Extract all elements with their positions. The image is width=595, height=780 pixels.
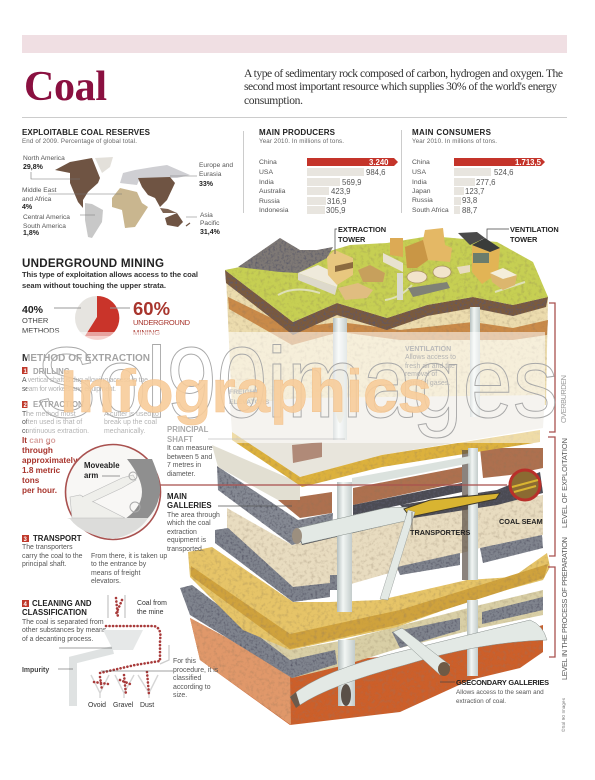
- heading: reserves: End of 2009. Percentage of global total.: [22, 138, 137, 145]
- map labels: [22, 155, 233, 237]
- label: extraction tower: TOWER: [338, 235, 366, 244]
- bar chart: consumers: Russia: [412, 197, 433, 204]
- detail circle: moveable arm: Moveable: [84, 461, 120, 470]
- note: classification: For this: [173, 658, 197, 665]
- intro text: A type of sedimentary rock composed of carbon, hydrogen and oxygen. The: [244, 67, 563, 80]
- bar chart: producers: 3.240: [369, 158, 389, 167]
- watermark: Infographics: Infographics: [60, 358, 432, 425]
- label: ventilation: Allows access to: [405, 354, 456, 361]
- galleries and lower shafts: [290, 448, 547, 708]
- label: secondary galleries: GSECONDARY GALLERIES: [456, 678, 549, 687]
- heading: producers: MAIN PRODUCERS: [259, 128, 336, 137]
- step 1 drilling: seam for workers and equipment.: [22, 386, 116, 393]
- map labels: 29,8%: [23, 164, 44, 171]
- pie chart: [75, 296, 119, 340]
- step 4 cleaning: CLEANING AND: [32, 599, 92, 608]
- label: secondary galleries: extraction of coal.: [456, 698, 506, 705]
- bar chart: producers: 984,6: [366, 168, 386, 177]
- step 3 transport: elevators.: [91, 578, 121, 585]
- illustration: mine cross-section: [180, 228, 550, 725]
- diagram labels: Dust: [140, 702, 154, 709]
- map leader lines: [31, 172, 197, 217]
- map labels: 4%: [22, 204, 33, 211]
- stratum: orange stripe: [228, 297, 548, 345]
- bracket: level of exploitation: [548, 437, 569, 556]
- bar chart: producers: Indonesia: [259, 207, 289, 214]
- heading: producers: [259, 128, 344, 145]
- map labels: Middle East: [22, 187, 57, 194]
- bar chart: consumers: 93,8: [462, 196, 477, 205]
- leader: principal shaft: [208, 438, 345, 440]
- stratum: beige under yellow: [195, 590, 543, 678]
- label: main galleries: equipment is: [167, 537, 207, 544]
- pie label 60: UNDERGROUND: [133, 318, 191, 327]
- map labels: Eurasia: [199, 171, 222, 178]
- bar chart: producers: USA: [259, 169, 273, 176]
- callout: red text: tons: [22, 476, 40, 485]
- callout: red text: 1.8 metric: [22, 466, 61, 475]
- map labels: Central America: [23, 214, 70, 221]
- bar chart: consumers: 88,7: [462, 206, 477, 215]
- heading: reserves: [22, 128, 151, 145]
- note: classification: [173, 658, 219, 699]
- bar chart: producers: 423,9: [331, 187, 351, 196]
- map labels: Europe and: [199, 162, 233, 169]
- bar chart: producers: 316,9: [327, 197, 347, 206]
- pie label 60: [133, 298, 191, 337]
- map labels: Pacific: [200, 220, 220, 227]
- label: transporters: [410, 512, 471, 537]
- label: ventilation: removal of: [405, 371, 437, 378]
- title: Coal: [24, 64, 107, 110]
- panel: exploitable coal reserves: [22, 128, 233, 238]
- label: main galleries: GALLERIES: [167, 501, 212, 510]
- bar chart: consumers: [412, 158, 545, 215]
- step 3 transport: means of freight: [91, 570, 140, 577]
- label: freight elevators: FREIGHT: [229, 389, 260, 396]
- header band: [22, 35, 567, 53]
- heading: consumers: MAIN CONSUMERS: [412, 128, 492, 137]
- callout: red text: approximately: [22, 456, 78, 465]
- step 4 cleaning: CLASSIFICATION: [22, 608, 87, 617]
- label: principal shaft: PRINCIPAL: [167, 425, 209, 434]
- stratum: brick layers: [278, 448, 543, 518]
- bar chart: producers: Russia: [259, 198, 280, 205]
- coal seam detail ring: [510, 470, 540, 500]
- upper shaft pipes: [333, 307, 480, 440]
- label: main galleries: [166, 492, 220, 553]
- stratum: surface edge: [225, 270, 548, 335]
- heading: reserves: EXPLOITABLE COAL RESERVES: [22, 128, 151, 137]
- surface paths: [278, 282, 525, 300]
- pie label 60: 60%: [133, 298, 170, 319]
- label: ventilation tower: [487, 225, 559, 244]
- label: ventilation tower: TOWER: [510, 235, 538, 244]
- step 3 transport: to the entrance by: [91, 561, 147, 568]
- extraction tower buildings: [298, 250, 385, 300]
- detail circle: moveable arm: arm: [84, 471, 98, 480]
- step 2 extraction: 2: [24, 403, 28, 409]
- bracket: overburden: OVERBURDEN: [559, 375, 568, 423]
- diagram labels: Gravel: [113, 702, 134, 709]
- map labels: Asia: [200, 212, 213, 219]
- step 2 extraction: EXTRACTION: [33, 400, 84, 409]
- step 2 extraction: mechanically.: [104, 428, 145, 435]
- stratum: beige block: [227, 495, 543, 590]
- stratum: thick yellow layer: [188, 547, 550, 650]
- world map: [55, 157, 190, 238]
- pie label 40: [22, 304, 60, 335]
- label: ventilation: harmful gases.: [405, 380, 450, 387]
- step 1 drilling: DRILLING: [33, 367, 70, 376]
- subhead: This type of exploitation allows access to the coal: [22, 270, 198, 279]
- map labels: 33%: [199, 181, 214, 188]
- pie leader lines: [54, 307, 130, 309]
- step 4 cleaning: 4: [24, 602, 28, 608]
- bar chart: producers: 569,9: [342, 178, 362, 187]
- bracket: overburden: [549, 303, 568, 432]
- diagram labels: Ovoid: [88, 702, 106, 709]
- bar chart: consumers: USA: [412, 169, 426, 176]
- step 2 extraction: The method most: [22, 411, 76, 418]
- stratum: stone bands under yellow: [180, 585, 543, 678]
- panel: method of extraction: [22, 353, 345, 709]
- label: secondary galleries: Allows access to the seam and: [456, 689, 544, 696]
- panel: main consumers: [412, 128, 545, 215]
- note: classification: according to: [173, 684, 211, 691]
- label: main galleries: MAIN: [167, 492, 187, 501]
- leader: main galleries: [218, 505, 292, 507]
- heading: consumers: [412, 128, 497, 145]
- note: classification: procedure, it is: [173, 667, 219, 674]
- label: principal shaft: [167, 425, 213, 478]
- step 3 transport: [22, 534, 167, 585]
- mountain: [238, 238, 333, 273]
- callout line: coal seam to detail circle: [157, 484, 507, 486]
- label: ventilation: [405, 346, 456, 387]
- step 3 transport: principal shaft.: [22, 561, 67, 568]
- step 4 cleaning: The coal is separated from: [22, 619, 104, 626]
- stratum: orange base: [190, 618, 543, 725]
- intro text: [244, 67, 563, 107]
- label: coal seam: COAL SEAM: [499, 517, 543, 526]
- panel: underground mining: [22, 257, 198, 340]
- bracket: level in preparation: LEVEL IN THE PROCESS OF PREPARATION: [560, 537, 569, 680]
- label: ventilation: VENTILATION: [405, 346, 451, 353]
- step 4 cleaning: [22, 599, 107, 643]
- step 2 extraction: break up the coal: [104, 419, 157, 426]
- decanting diagram: [58, 595, 173, 706]
- callout: red text: It can go: [22, 436, 56, 445]
- label: principal shaft: SHAFT: [167, 435, 193, 444]
- heading: method: METHOD OF EXTRACTION: [22, 353, 150, 364]
- step 4 cleaning: other substances by means: [22, 627, 107, 634]
- bar chart: producers: India: [259, 179, 274, 186]
- bar chart: consumers: India: [412, 179, 427, 186]
- label: ventilation: fresh air and the: [405, 363, 455, 370]
- intro text: consumption.: [244, 94, 303, 107]
- subhead: seam without touching the upper strata.: [22, 281, 166, 290]
- bracket: level of exploitation: LEVEL OF EXPLOITATION: [560, 438, 569, 528]
- note: classification: classified: [173, 675, 202, 682]
- callout: red text: per hour.: [22, 486, 57, 495]
- label: transporters: TRANSPORTERS: [410, 528, 471, 537]
- diagram labels: [22, 600, 167, 709]
- diagram labels: Coal from: [137, 600, 167, 607]
- step 2 extraction: [22, 400, 159, 435]
- label: principal shaft: between 5 and: [167, 454, 212, 461]
- heading: underground mining: UNDERGROUND MINING: [22, 257, 164, 270]
- bar chart: producers: [259, 158, 398, 215]
- diagram labels: the mine: [137, 609, 164, 616]
- step 3 transport: The transporters: [22, 544, 73, 551]
- bar chart: consumers: South Africa: [412, 207, 449, 214]
- pie label 40: OTHER: [22, 316, 49, 325]
- label: extraction tower: [335, 225, 386, 254]
- label: principal shaft: diameter.: [167, 471, 195, 478]
- credit: ©Sol 90 Images: [560, 697, 566, 732]
- intro text: second most important resource which supplies 30% of the world's energy: [244, 80, 557, 93]
- label: principal shaft: 7 metres in: [167, 462, 201, 469]
- label: ventilation tower: VENTILATION: [510, 225, 559, 234]
- map labels: South America: [23, 223, 66, 230]
- bar chart: consumers: China: [412, 159, 430, 166]
- surface: green terrain: [225, 236, 548, 322]
- label: main galleries: which the coal: [166, 520, 211, 527]
- bar chart: consumers: 524,6: [494, 168, 514, 177]
- step 1 drilling: A vertical shaft is dug allowing access to the: [22, 377, 148, 384]
- step 1 drilling: 1: [24, 369, 28, 375]
- callout: red text: [22, 436, 78, 495]
- heading: consumers: Year 2010. In millions of tons.: [412, 138, 497, 145]
- step 2 extraction: A cutter is used to: [104, 411, 159, 418]
- stratum: stone band upper: [217, 466, 333, 545]
- step 1 drilling: [22, 367, 148, 393]
- label: main galleries: The area through: [167, 512, 220, 519]
- bar chart: producers: China: [259, 159, 277, 166]
- label: main galleries: transported.: [167, 546, 204, 553]
- watermark wash: [27, 332, 545, 443]
- label: freight elevators: [229, 389, 270, 406]
- step 3 transport: 3: [24, 537, 28, 543]
- step 2 extraction: often used is that of: [22, 419, 82, 426]
- map labels: 31,4%: [200, 229, 221, 236]
- map labels: North America: [23, 155, 65, 162]
- bar chart: consumers: Japan: [412, 188, 431, 195]
- step 4 cleaning: of a decanting process.: [22, 636, 93, 643]
- label: secondary galleries: [440, 678, 549, 705]
- stratum: dark band around seam: [300, 472, 543, 545]
- stratum: white slab: [212, 395, 545, 500]
- bar chart: consumers: 277,6: [476, 178, 496, 187]
- pie label 40: 40%: [22, 304, 44, 316]
- ventilation tower buildings: [458, 232, 517, 290]
- bar chart: consumers: 123,7: [465, 187, 485, 196]
- stratum: yellow seam: [232, 430, 540, 487]
- step 3 transport: TRANSPORT: [33, 534, 82, 543]
- step 3 transport: From there, it is taken up: [91, 553, 167, 560]
- label: extraction tower: EXTRACTION: [338, 225, 386, 234]
- pie label 40: METHODS: [22, 326, 60, 335]
- bar chart: producers: Australia: [259, 188, 286, 195]
- subhead: [22, 270, 198, 290]
- heading: producers: Year 2010. In millions of tons.: [259, 138, 344, 145]
- map labels: 1,8%: [23, 230, 40, 237]
- central plant buildings: [383, 228, 470, 300]
- pie label 60: MINING: [133, 328, 160, 337]
- label: principal shaft: It can measure: [167, 445, 213, 452]
- detail circle: moveable arm: [66, 444, 160, 540]
- bar chart: producers: 305,9: [326, 206, 346, 215]
- bracket: level in preparation: [548, 537, 569, 680]
- stratum: overburden: [226, 275, 548, 440]
- callout: red text: through: [22, 446, 53, 455]
- stratum: stone band lower: [215, 528, 543, 602]
- bar chart: consumers: 1.713,5: [515, 158, 542, 167]
- diagram labels: Impurity: [22, 667, 49, 674]
- note: classification: size.: [173, 692, 187, 699]
- label: freight elevators: ELEVATORS: [229, 399, 270, 406]
- label: main galleries: extraction: [167, 529, 197, 536]
- map labels: and Africa: [22, 196, 52, 203]
- step 3 transport: carry the coal to the: [22, 553, 83, 560]
- panel: main producers: [259, 128, 398, 215]
- step 2 extraction: continuous extraction.: [22, 428, 89, 435]
